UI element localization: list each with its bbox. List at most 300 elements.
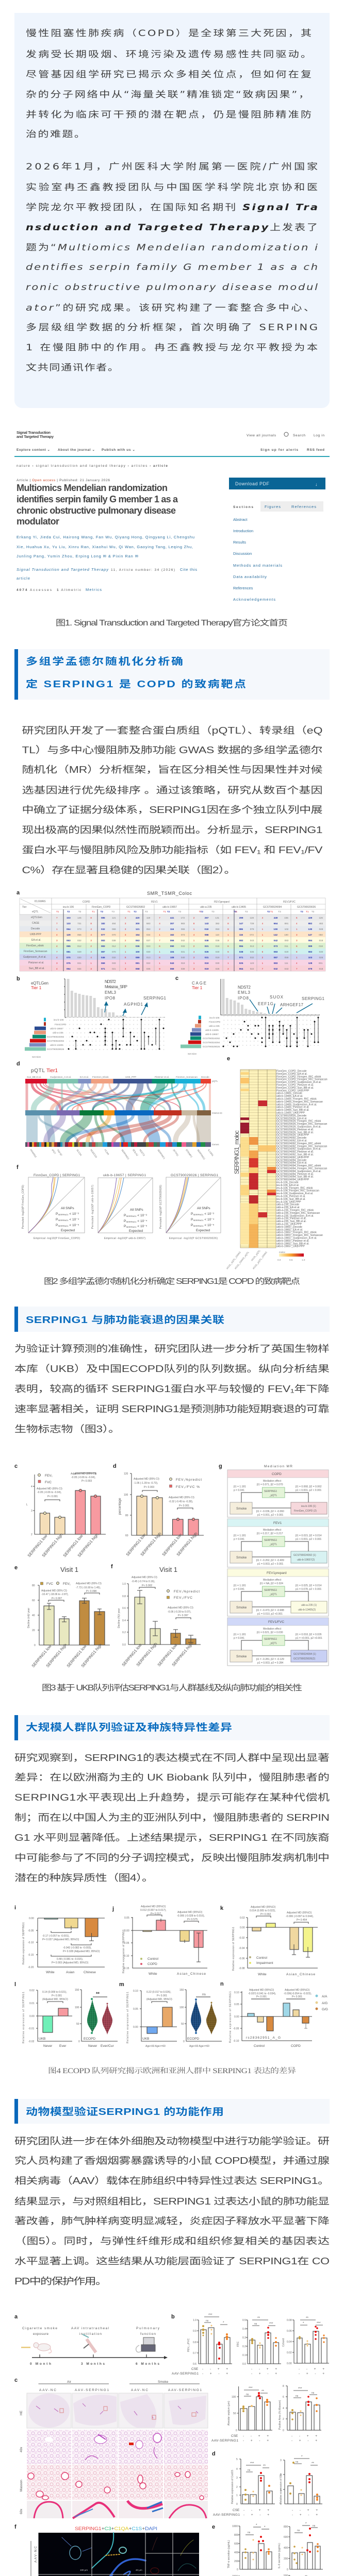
panel d: sankey pQTL to GWAS to genes: Genes <box>212 1143 219 1146</box>
panel i: -0.10 <box>28 1941 34 1944</box>
panel i <box>14 1905 105 1974</box>
panel e: visit 1 decline bars: e <box>14 1565 18 1571</box>
gene strip <box>25 1142 211 1147</box>
site top navigation: Publish with us ⌄ <box>102 448 135 452</box>
panel d: sankey pQTL to GWAS to genes: pQTL <box>212 1080 218 1082</box>
panel m: UKB and ECOPD age: ECOPD <box>187 2037 199 2041</box>
panel b: upset plot eQTLGen: FinnCOPD <box>55 1023 67 1026</box>
alveolar septum bar chart: Alveolar septum (μm) <box>227 2401 231 2426</box>
mediation block: COPD: FinnGen_COPD (2) <box>294 1510 317 1513</box>
panel f: visit 1 percent decline bars: SERPING1 high <box>171 1641 194 1667</box>
panel m: UKB and ECOPD age: 50 <box>181 2023 184 2026</box>
panel f: QQ plots: P <box>124 1219 126 1223</box>
panel c: baseline FEV1 and FVC bars: c <box>14 1463 18 1469</box>
panel i: -0.05 <box>28 1929 34 1933</box>
panel c: upset plot CAGE: c <box>175 975 178 981</box>
mediation block: FEV1 percent predicted: β1 = 1.181 <box>234 1584 246 1587</box>
panel b: pulmonary function bars: ns <box>254 2323 257 2326</box>
heading: section 1 <box>14 649 330 700</box>
panel j: COPD <box>148 1962 157 1966</box>
panel a: tier table: 129 077 154 162 086 116 142 147 <box>67 934 312 936</box>
panel d: sankey pQTL to GWAS to genes: NUDCD3 <box>90 1149 98 1159</box>
alveolar septum bar chart <box>227 2386 272 2432</box>
mediation block: FEV1/FVC: β1 = -0.281, β2 = -0.129 <box>256 1658 284 1661</box>
heatmap row labels: GCST90029026_UKB-PPP <box>276 1134 309 1137</box>
panel n: genotype: P< 0.001 <box>292 1995 302 1998</box>
panel b: pulmonary function bars: 0.0 <box>242 2363 246 2366</box>
chart: IL-6: * <box>305 2522 307 2526</box>
heatmap row labels: GCST90024094_EA et al. <box>276 1162 307 1165</box>
panel l: UKB and ECOPD smoking: Ever/Cur <box>101 2044 114 2048</box>
panel c: upset plot CAGE: ieu-b-106 <box>209 1016 220 1019</box>
text block: intro paragraph 1: 发病受长期吸烟、环境污染及遗传易感性共同驱动。 <box>26 49 312 59</box>
panel n: genotype: 0.00 <box>234 2015 239 2019</box>
panel f: visit 1 percent decline bars: 0.0 <box>122 1643 126 1647</box>
text block: section 3 body: 潜在的种族异质性（图4）。 <box>14 1873 154 1883</box>
panel c: baseline FEV1 and FVC bars: SERPING1 low <box>62 1533 84 1558</box>
panel f: visit 1 percent decline bars: SERPING1 low <box>157 1642 178 1667</box>
panel f: QQ plots: SERPING1 <box>58 1225 69 1227</box>
panel c: histology images: CSE <box>231 2434 238 2438</box>
text block: section 3 body: SERPING1水平表现出上升趋势，提示可能存在某种代偿机 <box>14 1792 330 1803</box>
caption: figure 4: 图4 ECOPD 队列研究揭示欧洲和亚洲人群中 SERPING1 表达的差异 <box>48 2066 296 2075</box>
text block: section 1 body: 现出极高的因果似然性而脱颖而出。分析显示，SERPING1 <box>22 825 323 835</box>
panel m: UKB and ECOPD age: Age<60 Age>=60 <box>145 2045 166 2048</box>
panel f: QQ plots: < 10⁻³ <box>204 1212 215 1216</box>
heatmap row labels: ukb-b-13405_Finngen_RIC_ebiok <box>276 1097 317 1100</box>
panel f: visit 1 percent decline bars: 0.6 <box>122 1607 126 1610</box>
panel c: histology images: AAV-NC <box>39 2388 56 2392</box>
panel k: Impairment <box>256 1961 273 1965</box>
panel d: gene expression bars: 3 <box>236 2477 238 2480</box>
sections sidebar: Methods and materials <box>233 563 282 568</box>
panel c: histology images: AAV-SERPING1 <box>211 2439 238 2443</box>
panel b: upset plot eQTLGen: b <box>17 976 20 982</box>
authors: Erkang Yi, Jieda Cui, Hairong Wang, Fan Wu, Qiyang Hong, Qingyang Li, Chengshu <box>17 535 194 539</box>
panel d: baseline percentage bars: -1.06 (-1.39 to -0.73), <box>134 1482 158 1485</box>
panel j: Adjusted MD (95%CI) <box>177 1911 203 1914</box>
panel e: coloc heatmap: e <box>227 1056 230 1062</box>
mediation block: COPD: _pQTL <box>269 1494 277 1497</box>
panel c: upset plot CAGE: FinnCOPD <box>209 1021 221 1023</box>
heatmap row labels: ukb-b-19657_Sun_BB et al. <box>276 1242 309 1245</box>
panel b: upset plot eQTLGen: Metazoa_SRP <box>105 985 127 989</box>
text block: intro paragraph 2: 多层级组学数据的分析框架，首次明确了 SERPING <box>26 323 318 332</box>
text block: intro paragraph 1: 杂的分子网络中从“海量关联”精准锁定“致病因果”， <box>26 90 309 99</box>
panel d: baseline percentage bars: percentage <box>118 1498 122 1515</box>
heatmap row labels: ukb-b-19657_Decode <box>276 1226 302 1229</box>
panel b: upset plot eQTLGen: ukb-b-13405 <box>50 1044 63 1046</box>
panel d: sankey pQTL to GWAS to genes: PPARGC <box>29 1149 38 1159</box>
text block: section 4 body: 相关病毒（AAV）载体在肺组织中特异性过表达 SERPING1。 <box>14 2176 330 2186</box>
40x stain row <box>27 2430 208 2464</box>
citation and metrics: 11, Article number: 34 (2026) <box>111 568 175 572</box>
heatmap row labels: FinnGen_COPD_Finngen_RIC_Somascan <box>276 1078 327 1081</box>
heading: section 2: SERPING1 与肺功能衰退的因果关联 <box>26 1314 224 1325</box>
mediation block: FEV1: FEV1 <box>273 1521 282 1525</box>
positive area bar chart: 6 <box>283 2396 284 2399</box>
panel a: tier table: 065 083 036 090 021 084 073 089 <box>67 945 313 947</box>
panel c: histology images: - + - + <box>291 2439 317 2443</box>
panel e: visit 1 decline bars: SERPING1 high <box>80 1642 103 1668</box>
panel j: Adjusted MD (95%CI) <box>141 1905 166 1908</box>
mediation block: FEV1/FVC: p1 = <0.001, p2 <0.001 <box>296 1637 322 1640</box>
panel f: QQ plots: P <box>124 1214 126 1217</box>
panel d: gene expression bars: Relative expression of Cxcl15 <box>231 2470 234 2504</box>
panel a: tier table: Sun_BB et al. <box>29 967 45 970</box>
chart: TNF-a: 1000 <box>232 2525 238 2528</box>
panel a: tier table: 012 012 023 033 018 013 011 018 <box>77 945 323 947</box>
panel f: QQ plots: Expected <box>61 1229 75 1232</box>
panel k: White <box>258 1973 267 1976</box>
panel e: coloc heatmap: #COL_eQTL_GWAS <box>226 1251 241 1270</box>
panel a: tier table: 081 087 100 104 026 038 083 083 <box>67 951 313 953</box>
treatment labels: - - + + <box>251 2367 277 2371</box>
panel n: genotype <box>220 1981 328 2048</box>
panel b: pulmonary function bars: ** <box>257 2316 260 2320</box>
mediation block: FEV1/FVC: β1 = 0.018, β2 = 0.026 <box>296 1633 322 1636</box>
panel f: QQ plots: P <box>124 1225 126 1228</box>
panel l: UKB and ECOPD smoking: -0.01 <box>28 2027 35 2030</box>
panel l: UKB and ECOPD smoking: UKB <box>39 2037 45 2041</box>
heatmap row labels: GCST90029026_Pietzner et al. <box>276 1128 314 1131</box>
panel n: genotype: 0.05 <box>234 2003 239 2006</box>
panel d: baseline percentage bars: -0.32 (-0.45 to -0.28), <box>169 1500 193 1503</box>
panel b: upset plot eQTLGen: GCST90024094 <box>47 1040 64 1042</box>
panel f: QQ plots: Permuted -log10(P ukb-b-19657) <box>91 1185 94 1229</box>
panel n: genotype: Relative expression of SERPING1 <box>229 1991 232 2043</box>
treatment labels <box>172 2367 324 2376</box>
panel d: gene expression bars: 0 <box>280 2503 282 2506</box>
panel c: baseline FEV1 and FVC bars: SERPING1 high <box>77 1532 100 1558</box>
mediation block: FEV1/FVC: β1 = 0.021, β2 = 0.030 <box>257 1631 283 1634</box>
panel: introduction <box>14 13 330 408</box>
alveolar septum bar chart: *** <box>249 2386 253 2390</box>
text block: section 2 body <box>14 1344 330 1434</box>
panel f: visit 1 percent decline bars: f <box>111 1564 113 1570</box>
panel a: experiment timeline: instillation <box>79 2332 102 2336</box>
panel d: gene expression bars <box>212 2451 322 2517</box>
text block: section 3 body <box>14 1753 330 1883</box>
text block: section 3 body: 中可能参与了不同的分子调控模式，反映出慢阻肺发病机制中 <box>14 1853 330 1863</box>
panel a: tier table: 133 182 300 307 143 147 664 882 <box>67 922 313 925</box>
heading: section 2 <box>14 1307 330 1332</box>
panel j: White <box>149 1972 157 1976</box>
panel a: experiment timeline: exposure <box>33 2332 48 2336</box>
text block: intro paragraph 2: 1 在慢阻肺中的作用。冉丕鑫教授与龙尔平教授为本 <box>26 343 318 352</box>
caption: figure 2: 图2 多组学孟德尔随机化分析确定 SERPING1是 COPD 的致病靶点 <box>44 1277 300 1286</box>
text block: section 2 body: 生物标志物（图3）。 <box>14 1424 120 1434</box>
panel d: gene expression bars: 1 <box>236 2494 238 2497</box>
text block: section 1 body: C%）存在显著且稳健的因果关联（图2）。 <box>22 865 236 875</box>
panel n: genotype: 0.10 <box>234 1991 239 1994</box>
positive area bar chart: *** <box>298 2387 302 2391</box>
panel n: genotype: -0.10 <box>233 2040 239 2043</box>
panel n: genotype: n <box>220 1981 224 1987</box>
mediation block: FEV1: p1 < 0.001, p2 < 0.001 <box>296 1538 322 1541</box>
panel e: visit 1 decline bars: Adjusted MD (95% CI) <box>41 1589 67 1592</box>
mediation block: FEV1 percent predicted: ukb-a-235 (1) <box>301 1604 317 1607</box>
journal logo <box>17 430 54 439</box>
panel a: tier table: T1 T1 T1 T1 T1 T1 T1 T1 <box>56 910 309 913</box>
panel f: QQ plots: < 10⁻⁵ <box>69 1224 79 1227</box>
panel b: pulmonary function bars: *** <box>208 2313 212 2317</box>
heatmap row labels: ieu-b-106_UKB-PPP <box>276 1200 301 1204</box>
text block: section 4 body: 水平显著上调。这些结果从功能层面验证了 SERPING1在 CO <box>14 2256 330 2266</box>
heatmap row labels: FinnGen_COPD_UKB-PPP <box>276 1089 309 1092</box>
panel c: upset plot CAGE: NDST2 <box>238 985 251 990</box>
panel a: tier table: 029 070 030 031 030 035 020 030 <box>77 951 323 953</box>
panel e: coloc heatmap: #COL_GWAS_eQTL <box>234 1251 250 1270</box>
panel f: immunofluorescence <box>14 2524 199 2576</box>
panel c: upset plot CAGE: SUOX <box>270 995 284 999</box>
panel b: pulmonary function bars: 0.1 <box>242 2354 246 2357</box>
panel d: baseline percentage bars: 60 <box>125 1534 128 1537</box>
panel k: 0.02 <box>240 1917 245 1920</box>
panel l: UKB and ECOPD smoking: 0.00 <box>29 2015 35 2018</box>
panel c: baseline FEV1 and FVC bars: 4 <box>31 1485 32 1488</box>
panel e: visit 1 decline bars: FEV₁ <box>63 1582 71 1586</box>
authors: Xie, Huahua Xu, Yu Liu, Xinru Ran, Xiaohui Wu, Qi Wan, Gaoying Tang, Leqing Zhu, <box>17 545 193 549</box>
mediation block: FEV1 <box>227 1519 329 1567</box>
caption: figure 3: 图3 基于 UKB队列评估SERPING1与人群基线及纵向肺功能的相关性 <box>42 1683 302 1692</box>
figure 2: multi-omics MR <box>17 890 327 1270</box>
panel d: gene expression bars: - - + + <box>292 2509 318 2512</box>
panel b: pulmonary function bars: FRC <box>237 2341 240 2347</box>
site top navigation: RSS feed <box>307 448 324 452</box>
panel a: tier table: 4 2 3 6 2 6 4 6 <box>56 945 298 947</box>
panel d: sankey pQTL to GWAS to genes: Sun_BB et al. <box>27 1076 41 1078</box>
mediation block: COPD: p1 = 0.001, p2 < 0.001 <box>257 1514 284 1517</box>
text block: intro paragraph 2: dentifies serpin family G member 1 as a ch <box>26 262 318 272</box>
heatmap row labels: GCST90024092_Finngen_RIC_ebiok <box>276 1142 321 1145</box>
caption: figure 1: 图1. Signal Transduction and Targeted Therapy官方论文首页 <box>56 618 288 628</box>
panel d: gene expression bars: ns <box>248 2469 251 2472</box>
panel i: -0.20 <box>28 1966 34 1969</box>
panel k: 0.00 <box>240 1926 245 1929</box>
panel b: upset plot eQTLGen: ukb-b-19657 <box>50 1027 63 1030</box>
heatmap colour legend: moloc <box>279 1251 286 1253</box>
text block: section 2 body: 速率显著相关，证明 SERPING1是预测肺功能短期衰退的可靠 <box>14 1404 330 1414</box>
chart: IL-6: 0 <box>287 2568 288 2571</box>
panel f: visit 1 percent decline bars: Decline (%)/ year <box>118 1608 121 1628</box>
panel a: tier table: 075 069 081 043 019 025 083 128 <box>67 962 313 964</box>
text block: intro paragraph 2: 文共同通讯作者。 <box>26 363 119 372</box>
panel k: Control <box>256 1956 268 1960</box>
panel d: baseline percentage bars: 80 <box>125 1514 128 1517</box>
panel n: genotype: Adjusted MD (95%CI) <box>285 1989 310 1992</box>
mediation block: FEV1 percent predicted: p1 = 0.010, p2 <0.001 <box>257 1613 283 1616</box>
text block: intro paragraph 2 <box>26 162 318 372</box>
panel d: gene expression bars: ns <box>296 2461 299 2464</box>
panel f: QQ plots: SERPING1 <box>126 1226 137 1228</box>
panel c: upset plot CAGE: ARHGEF17 <box>280 1003 304 1007</box>
panel d: sankey pQTL to GWAS to genes: Gudjonsson_A et al. <box>50 1076 71 1078</box>
panel b: pulmonary function bars: Cchord <box>282 2338 285 2347</box>
panel d: gene expression bars: - - + + <box>243 2509 269 2512</box>
panel c: histology images <box>14 2377 321 2518</box>
panel f: QQ plots: < 10⁻⁴ <box>69 1218 79 1222</box>
panel k: k <box>220 1905 224 1911</box>
panel i: i <box>14 1905 16 1911</box>
panel f: QQ plots: SERPING1 <box>58 1219 69 1222</box>
panel b: pulmonary function bars: 0.06 <box>287 2330 292 2333</box>
positive area bar chart: 0 <box>283 2429 284 2432</box>
heatmap row labels: ukb-a-235_UKB-PPP <box>276 1223 302 1226</box>
positive area bar chart: ns <box>296 2395 299 2398</box>
panel a: tier table: GCST90024094 <box>263 906 282 909</box>
panel a: tier table: 145 121 119 172 131 128 155 126 <box>77 917 323 919</box>
panel c: baseline FEV1 and FVC bars: P< 0.003 <box>81 1480 92 1483</box>
panel a: tier table: 4 3 3 9 3 2 7 7 <box>56 968 298 970</box>
panel c: baseline FEV1 and FVC bars: Adjusted MD (95% CI) <box>71 1472 96 1476</box>
panel c: upset plot CAGE <box>175 975 325 1055</box>
panel d: baseline percentage bars: SERPING1 high <box>176 1531 199 1557</box>
panel l: UKB and ECOPD smoking: 100 <box>75 2006 79 2009</box>
panel d: sankey pQTL to GWAS to genes: NDST2 <box>139 1149 145 1157</box>
panel d: gene expression bars: 0 <box>236 2503 238 2506</box>
mediation block: COPD: β1 = 0.071, β2 = 0.070 <box>257 1483 283 1486</box>
heatmap row labels: GCST90024094_UKB-PPP <box>276 1178 309 1181</box>
panel k: P= 0.454 <box>297 1919 307 1922</box>
panel m: UKB and ECOPD age: 150 <box>179 1989 184 1992</box>
panel d: baseline percentage bars: P< 0.001 <box>179 1504 189 1507</box>
site top navigation: Search <box>293 434 305 437</box>
panel d: gene expression bars: ** <box>263 2464 266 2468</box>
panel b: upset plot eQTLGen <box>17 976 167 1058</box>
heatmap row labels: GCST90029026_Gudjonsson_A et al. <box>276 1125 321 1128</box>
timeline arrow <box>32 2354 168 2359</box>
panel i: Asian <box>66 1971 75 1974</box>
panel a: tier table: UKB-PPP <box>30 933 42 936</box>
mediation block: FEV1: GCST90024092 (1) <box>293 1554 316 1557</box>
sections sidebar: Introduction <box>233 529 253 533</box>
heatmap row labels: ukb-b-13405_EA et al. <box>276 1095 303 1098</box>
panel b: pulmonary function bars: * <box>303 2321 304 2325</box>
text block: section 4 body: 究人员构建了香烟烟雾暴露诱导的小鼠 COPD模型，并通过腺 <box>14 2156 330 2166</box>
heading: section 3: 大规模人群队列验证及种族特异性差异 <box>26 1722 232 1733</box>
panel e: coloc heatmap <box>226 1056 327 1270</box>
citation and metrics: Signal Transduction and Targeted Therapy <box>17 567 109 572</box>
panel n: genotype: -0.036(-0.054 to -0.023), <box>284 1992 312 1995</box>
chart: TNF-a: 400 <box>234 2551 239 2554</box>
text block: section 3 body: 差异：在以欧洲裔为主的 UK Biobank 队列中，慢阻肺患者的 <box>14 1772 330 1783</box>
text block: intro paragraph 2: nsduction and Targeted Therapy上发表了 <box>26 223 318 232</box>
panel f: visit 1 percent decline bars: P< 0.002 <box>142 1584 152 1587</box>
panel k: Relative expression of SERPING1 <box>232 1927 235 1971</box>
panel l: UKB and ECOPD smoking: 0 <box>78 2040 80 2043</box>
site top navigation: Sign up for alerts <box>260 448 298 452</box>
panel n: genotype: A/G <box>322 2002 327 2005</box>
heatmap row labels: ukb-b-19657_Finngen_RIC_Somascan <box>276 1234 323 1237</box>
panel j: -0.006 (-0.028 to 0.016), <box>177 1914 205 1918</box>
mediation block: FEV1/FVC: Smoke <box>236 1655 247 1658</box>
panel f: QQ plots: Expected <box>196 1229 210 1232</box>
arrows: highlighted genes <box>250 999 313 1014</box>
panel b: pulmonary function bars: ns <box>206 2319 209 2323</box>
sections sidebar <box>229 501 323 602</box>
panel e: visit 1 decline bars: 0 <box>34 1644 36 1647</box>
chart: IL-6: IL-6 secretion (pg/mL) <box>278 2543 281 2568</box>
panel e: visit 1 decline bars: P< 0.007 <box>52 1597 62 1600</box>
panel a: tier table: eQTL <box>32 910 39 913</box>
treatment labels: - - + + <box>202 2367 228 2371</box>
text block: section 1 body: 随机化（MR）分析框架，旨在区分相关性与因果性并对候 <box>22 765 323 775</box>
panel j: Control <box>148 1957 159 1961</box>
panel f: QQ plots: SERPING1 <box>126 1221 137 1223</box>
alveolar septum bar chart: ns <box>246 2393 249 2396</box>
panel l: UKB and ECOPD smoking: -0.02 <box>28 2040 35 2043</box>
heatmap row labels: ukb-b-19657_UKB-PPP <box>276 1245 305 1248</box>
chart: TNF-a: * <box>256 2523 257 2527</box>
heatmap row labels: GCST90024094_Decode <box>276 1159 306 1162</box>
panel k: Asian_Chinese <box>286 1973 315 1976</box>
panel k: -0.08 <box>239 1967 245 1970</box>
panel d: sankey pQTL to GWAS to genes: pQTL <box>31 1068 45 1074</box>
panel b: pulmonary function bars: *** <box>269 2322 273 2326</box>
panel d: gene expression bars: * <box>301 2455 303 2459</box>
panel j: -0.10 <box>123 1955 129 1958</box>
panel c: histology images: - - + + <box>291 2434 317 2438</box>
panel m: UKB and ECOPD age: 0.00 <box>133 2026 138 2029</box>
panel a: tier table: ukb-a-235 <box>200 906 212 909</box>
panel e: visit 1 decline bars: -7.73 (-16.90 to 1.45), <box>76 1586 101 1589</box>
panel f: QQ plots: Permuted -log10(P GCST90029026) <box>159 1185 162 1229</box>
panel f: visit 1 percent decline bars: FEV₁%predict <box>174 1590 200 1594</box>
panel b: upset plot eQTLGen: AGPHD1 <box>124 1002 143 1007</box>
panel a: tier table: GCST90029026 <box>297 906 316 909</box>
mediation block: FEV1 percent predicted: β1 = -0.473, β2 = -0.688 <box>256 1609 284 1612</box>
chart: IL-6: 400 <box>284 2547 288 2550</box>
sections sidebar: Discussion <box>233 551 252 556</box>
panel f: QQ plots: < 10⁻³ <box>69 1212 79 1216</box>
sections sidebar: Figures <box>265 504 281 509</box>
download pdf button: Download PDF <box>235 481 269 486</box>
mediation block: COPD: p1 < 0.001, p2 < 0.001 <box>296 1489 322 1492</box>
panel d: baseline percentage bars: 120 <box>124 1472 128 1476</box>
text block: intro paragraph 1: 尽管基因组学研究已揭示众多相关位点，但如何在复 <box>26 70 312 79</box>
treatment labels: AAV-SERPING1 <box>172 2372 199 2376</box>
panel b: pulmonary function bars: ** <box>306 2316 309 2320</box>
heatmap row labels: ieu-b-106_Finngen_RIC_Somascan <box>276 1190 319 1193</box>
text block: intro paragraph 2: 学院龙尔平教授团队，在国际知名期刊 Signal Tra <box>26 202 318 212</box>
mediation block: FEV1/FVC: FEV1/FVC <box>268 1620 284 1624</box>
panel f: QQ plots: SERPING1 <box>193 1213 204 1216</box>
panel a: experiment timeline: 6 Months <box>136 2362 159 2366</box>
panel f: QQ plots: SERPING1 <box>126 1215 137 1217</box>
panel m: UKB and ECOPD age <box>119 1981 222 2048</box>
panel a: tier table: 731 484 583 983 382 729 891 482 <box>77 922 323 925</box>
panel a: tier table: 7 4 1 1 4 6 6 8 <box>56 951 298 953</box>
text block: section 3 body: 制；而在以中国人为主的亚洲队列中，慢阻肺患者的 SERPIN <box>14 1812 330 1823</box>
mediation block: FEV1 percent predicted: ukb-b-13405(2) <box>298 1608 316 1612</box>
panel f: QQ plots: f <box>17 1164 19 1171</box>
panel c: histology images: 60x <box>20 2509 23 2514</box>
panel c: histology images: c <box>14 2377 18 2383</box>
panel j: 0.012 (0.007 to 0.017), <box>140 1909 167 1912</box>
text block: section 3 body: G1 水平则显著降低。上述结果提示，SERPING1 在不同族裔 <box>14 1833 330 1843</box>
chart: TNF-a: 200 <box>234 2560 239 2563</box>
panel b: pulmonary function bars: 0.3 <box>242 2336 246 2340</box>
chart: IL-6: 800 <box>284 2526 288 2529</box>
panel b: upset plot eQTLGen: IPO8 <box>105 996 116 1001</box>
mediation block: FEV1/FVC: p = 0.041 <box>234 1637 244 1640</box>
Masson stain row <box>27 2465 208 2500</box>
panel c: histology images: AAV-SERPING1 <box>75 2388 109 2392</box>
heatmap row labels: ukb-b-19657_Gudjonsson_A et al. <box>276 1236 317 1240</box>
panel m: UKB and ECOPD age: 0 <box>183 2040 185 2043</box>
panel j: P= 0.017 <box>151 1912 161 1916</box>
